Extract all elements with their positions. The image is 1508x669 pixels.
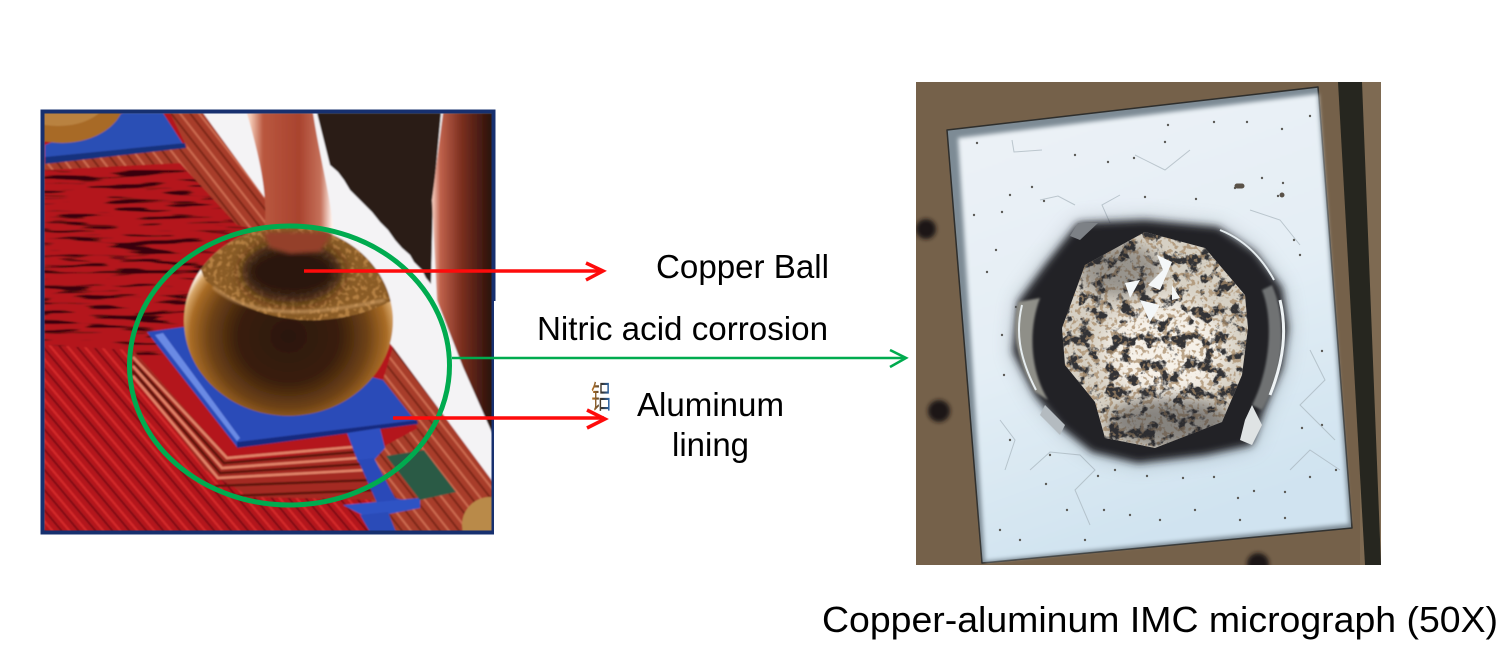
- corrosion halo: [1013, 220, 1288, 463]
- brown passivation bands: [44, 113, 493, 532]
- corner ball fragment: [461, 496, 492, 530]
- arrow: aluminum lining: [393, 410, 605, 428]
- green circuit cells: [386, 450, 456, 500]
- label: nitric acid corrosion: Nitric acid corrosion: [537, 310, 828, 347]
- die edge: [947, 87, 1352, 563]
- large specks: [1237, 186, 1282, 195]
- brown package background: [916, 82, 1381, 565]
- white background behind chip edge: [203, 113, 493, 482]
- label: aluminum lining: [637, 386, 784, 463]
- label: aluminum lining: Aluminum: [637, 386, 784, 423]
- arrow: nitric acid corrosion: [452, 350, 906, 367]
- main bond wire: [247, 113, 334, 240]
- die surface specks: [974, 116, 1336, 540]
- stray glyph: 铝: [591, 379, 611, 415]
- blue aluminum pad: [147, 327, 420, 532]
- photo: copper-aluminum IMC micrograph: [916, 82, 1381, 575]
- arrow: copper ball: [304, 263, 603, 280]
- right bond wire: [432, 113, 493, 435]
- hairline cracks: [1000, 140, 1340, 525]
- top-left neighbour pad: [44, 114, 187, 165]
- label: copper ball: Copper Ball: [656, 248, 829, 285]
- label: aluminum lining: lining: [672, 426, 749, 463]
- package holes: [916, 219, 1269, 575]
- red circuit board surface: [44, 113, 493, 532]
- green circle highlighting the ball bond: [130, 226, 450, 505]
- black background corner: [317, 113, 441, 284]
- photo frame: [42, 112, 494, 532]
- photo: SEM image of copper ball on aluminum pad: [40, 110, 496, 534]
- die surface: [958, 94, 1349, 561]
- corroded ring: [1013, 220, 1288, 463]
- caption: Copper-aluminum IMC micrograph (50X): [822, 599, 1498, 640]
- copper ball: [184, 226, 393, 416]
- exposed IMC core: [1062, 232, 1248, 448]
